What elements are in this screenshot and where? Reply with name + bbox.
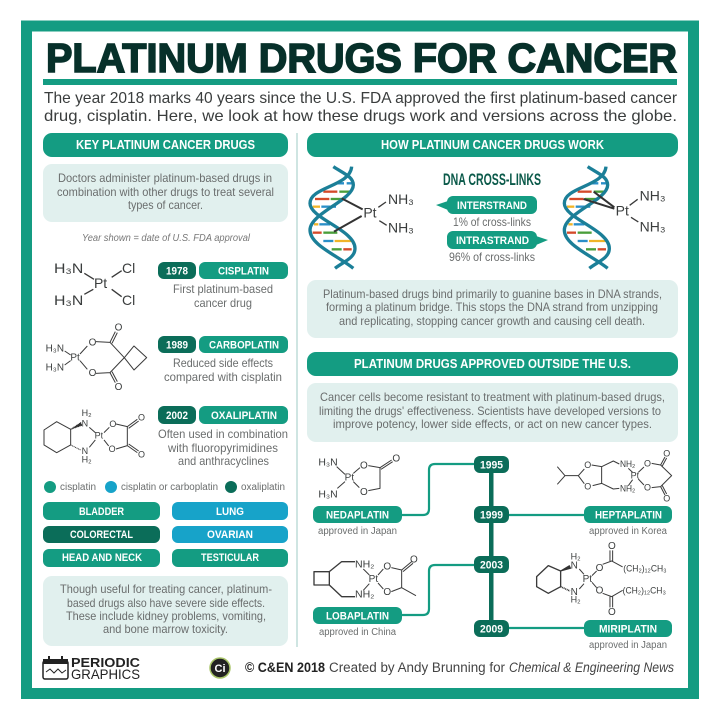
logo: periodic graphics: PERIODIC — [71, 656, 140, 670]
drug label: miriplatin — [584, 620, 672, 651]
drug label: oxaliplatin: and anthracyclines — [178, 455, 269, 468]
heading: outside the u.s. — [307, 352, 678, 376]
heading: how platinum drugs work — [307, 133, 678, 157]
drug label: cisplatin: CISPLATIN — [218, 266, 269, 278]
text block: resistance: improve potency, lower side effects, or act on new cancer types. — [333, 418, 652, 431]
molecule: lobaplatin: NH₂ — [355, 590, 374, 601]
callout: intrastrand: INTRASTRAND — [456, 235, 529, 247]
diagram: intrastrand cross-link: Pt — [616, 202, 629, 218]
text block: side effects: based drugs also have severe side effects. — [67, 597, 265, 610]
timeline: 2003 — [480, 560, 503, 572]
text block: mechanism: forming a platinum bridge. This stops the DNA strand from unzipping — [326, 301, 658, 314]
molecule: heptaplatin: O — [584, 460, 591, 470]
molecule: miriplatin: O — [596, 563, 604, 574]
molecule: nedaplatin: O — [360, 487, 368, 498]
text block: combination therapy: combination with other drugs to treat several — [57, 186, 274, 199]
molecule: cisplatin: H₃N — [54, 292, 83, 308]
molecule: oxaliplatin: H₂ — [82, 408, 92, 418]
molecule: nedaplatin — [318, 453, 400, 501]
title rule — [43, 79, 677, 85]
legend: oxaliplatin — [241, 482, 285, 493]
text block: side effects: These include kidney problems, vomiting, — [66, 610, 266, 623]
heading: outside the u.s.: PLATINUM DRUGS APPROVED OUTSIDE THE U.S. — [354, 357, 631, 371]
timeline — [402, 456, 584, 637]
legend: cisplatin — [60, 482, 96, 493]
molecule: heptaplatin: NH₂ — [620, 459, 636, 469]
molecule: nedaplatin: O — [360, 460, 368, 471]
timeline: 1999 — [480, 510, 503, 522]
callout: intrastrand: 96% of cross-links — [449, 251, 535, 264]
cancer type tags: OVARIAN — [207, 529, 253, 541]
drug label: cisplatin: First platinum-based — [173, 283, 273, 296]
molecule: carboplatin: O — [89, 337, 97, 348]
callout: intrastrand — [447, 231, 548, 264]
cancer type tags: TESTICULAR — [201, 552, 259, 564]
drug label: oxaliplatin: with fluoropyrimidines — [167, 442, 278, 455]
diagram: interstrand cross-link: NH₃ — [388, 191, 414, 207]
cancer type tags — [43, 502, 288, 567]
footer credit: Created by Andy Brunning for — [329, 660, 506, 675]
molecule: lobaplatin: O — [410, 554, 418, 565]
text block: resistance: limiting the drugs' effectiveness. Scientists have developed versions to — [319, 405, 661, 418]
molecule: carboplatin: H₃N — [46, 363, 64, 374]
molecule: miriplatin — [537, 541, 667, 618]
drug label: carboplatin: 1989 — [166, 340, 188, 352]
molecule: cisplatin: Cl — [122, 292, 135, 308]
text block: resistance — [307, 383, 678, 442]
callout: interstrand — [436, 196, 537, 229]
footer credit: Chemical & Engineering News — [509, 660, 674, 675]
molecule: miriplatin: H₂ — [571, 595, 581, 605]
molecule: miriplatin: Pt — [583, 574, 592, 585]
diagram: interstrand cross-link — [310, 167, 414, 268]
molecule: oxaliplatin: O — [138, 449, 145, 459]
logo: periodic graphics — [43, 656, 140, 682]
molecule: nedaplatin: Pt — [345, 473, 354, 484]
footer credit: © C&EN 2018 — [245, 660, 325, 675]
drug label: heptaplatin — [584, 506, 672, 537]
cancer type tags: HEAD AND NECK — [62, 552, 142, 564]
text block: side effects — [43, 576, 288, 646]
molecule: oxaliplatin: O — [138, 413, 145, 423]
text block: mechanism: and replicating, stopping cancer growth and causing cell death. — [339, 315, 645, 328]
drug label: cisplatin: cancer drug — [194, 297, 252, 310]
molecule: cisplatin — [54, 260, 135, 308]
text block: mechanism — [307, 280, 678, 338]
molecule: heptaplatin — [557, 448, 672, 504]
panel: platinum drugs approved outside the u.s. — [307, 352, 678, 651]
molecule: carboplatin: O — [115, 323, 123, 334]
callout: interstrand: INTERSTRAND — [457, 200, 527, 212]
molecule: heptaplatin: O — [663, 448, 670, 458]
intro text — [44, 90, 678, 125]
diagram: interstrand cross-link: Pt — [363, 204, 377, 220]
timeline: 1995 — [480, 460, 503, 472]
drug label: miriplatin: approved in Japan — [589, 640, 667, 651]
cancer type tags: LUNG — [216, 506, 244, 518]
drug label: heptaplatin: approved in Korea — [589, 526, 667, 537]
drug label: oxaliplatin — [158, 406, 288, 468]
intro text: drug, cisplatin. Here, we look at how these drugs work and versions across the globe. — [44, 108, 677, 125]
timeline: 2009 — [480, 624, 503, 636]
logo: periodic graphics: GRAPHICS — [71, 666, 140, 682]
diagram: intrastrand cross-link: NH₃ — [640, 188, 666, 204]
molecule: lobaplatin: O — [383, 562, 391, 573]
molecule: carboplatin: O — [89, 368, 97, 379]
molecule: heptaplatin: O — [663, 494, 670, 504]
molecule: nedaplatin: O — [392, 453, 400, 464]
molecule: cisplatin: Cl — [122, 260, 135, 276]
drug label: cisplatin: 1978 — [166, 266, 188, 278]
text block: side effects: Though useful for treating cancer, platinum- — [60, 583, 272, 596]
drug label: lobaplatin: approved in China — [319, 627, 396, 638]
text block: resistance: Cancer cells become resistant to treatment with platinum-based drugs, — [320, 391, 665, 404]
molecule: carboplatin — [46, 323, 147, 393]
molecule: miriplatin: O — [608, 607, 616, 618]
molecule: miriplatin: O — [596, 585, 604, 596]
drug label: nedaplatin: approved in Japan — [318, 526, 397, 537]
molecule: oxaliplatin: O — [109, 419, 116, 429]
drug label: oxaliplatin: OXALIPLATIN — [211, 410, 277, 422]
text block: side effects: and bone marrow toxicity. — [103, 623, 228, 636]
heading: dna cross-links: DNA CROSS-LINKS — [443, 171, 541, 189]
text block: mechanism: Platinum-based drugs bind primarily to guanine bases in DNA strands, — [323, 288, 662, 301]
molecule: cisplatin: Pt — [94, 275, 107, 291]
molecule: lobaplatin: Pt — [369, 574, 378, 585]
molecule: oxaliplatin: N — [82, 446, 88, 456]
drug label: carboplatin — [158, 336, 288, 384]
molecule: heptaplatin: Pt — [631, 470, 640, 480]
callout: interstrand: 1% of cross-links — [453, 216, 531, 229]
panel: key platinum cancer drugs — [43, 133, 288, 646]
note: year shown: Year shown = date of U.S. FDA approval — [82, 232, 251, 244]
molecule: miriplatin: H₂ — [571, 551, 581, 561]
molecule: carboplatin: Pt — [70, 352, 80, 363]
text block: combination therapy — [43, 164, 288, 222]
molecule: carboplatin: O — [115, 382, 123, 393]
drug label: lobaplatin: LOBAPLATIN — [326, 610, 389, 622]
drug label: nedaplatin: NEDAPLATIN — [326, 510, 389, 522]
drug label: cisplatin — [158, 262, 288, 310]
heading: how platinum drugs work: HOW PLATINUM CANCER DRUGS WORK — [381, 138, 604, 152]
diagram: intrastrand cross-link — [564, 167, 666, 268]
drug label: carboplatin: Reduced side effects — [173, 357, 273, 370]
footer credit: Ci — [214, 663, 226, 675]
intro text: The year 2018 marks 40 years since the U.S. FDA approved the first platinum-based cancer — [44, 90, 678, 107]
molecule: heptaplatin: O — [644, 482, 651, 492]
drug label: oxaliplatin: 2002 — [166, 410, 188, 422]
drug label: lobaplatin — [313, 607, 402, 638]
molecule: miriplatin: (CH₂)₁₂CH₃ — [623, 564, 667, 574]
text block: combination therapy: types of cancer. — [128, 199, 203, 212]
molecule: lobaplatin: NH₂ — [355, 559, 374, 570]
molecule: nedaplatin: H₃N — [318, 458, 338, 469]
molecule: heptaplatin: O — [584, 482, 591, 492]
molecule: cisplatin: H₃N — [54, 260, 83, 276]
drug label: miriplatin: MIRIPLATIN — [599, 624, 657, 636]
title: PLATINUM DRUGS FOR CANCER — [46, 35, 677, 81]
legend: cisplatin or carboplatin — [121, 482, 218, 493]
panel: how platinum cancer drugs work — [307, 133, 678, 338]
molecule: lobaplatin: O — [383, 587, 391, 598]
legend — [44, 481, 285, 493]
molecule: miriplatin: O — [608, 541, 616, 552]
drug label: carboplatin: compared with cisplatin — [164, 371, 282, 384]
molecule: oxaliplatin: N — [82, 419, 88, 429]
molecule: oxaliplatin: H₂ — [82, 455, 92, 465]
heading: key platinum cancer drugs: KEY PLATINUM CANCER DRUGS — [76, 138, 255, 152]
cancer type tags: COLORECTAL — [70, 529, 133, 541]
molecule: miriplatin: (CH₂)₁₂CH₃ — [623, 586, 666, 596]
molecule: heptaplatin: O — [644, 459, 651, 469]
molecule: oxaliplatin — [44, 408, 145, 465]
drug label: nedaplatin — [313, 506, 402, 537]
drug label: carboplatin: CARBOPLATIN — [209, 340, 279, 352]
diagram: interstrand cross-link: NH₃ — [388, 220, 414, 236]
heading: key platinum cancer drugs — [43, 133, 288, 157]
drug label: oxaliplatin: Often used in combination — [158, 428, 288, 441]
molecule: lobaplatin — [314, 554, 418, 601]
molecule: oxaliplatin: Pt — [95, 431, 104, 441]
molecule: nedaplatin: H₃N — [318, 490, 338, 501]
molecule: oxaliplatin: O — [109, 444, 116, 454]
molecule: heptaplatin: NH₂ — [620, 483, 636, 493]
footer credit — [210, 658, 674, 678]
molecule: carboplatin: H₃N — [46, 344, 64, 355]
diagram: intrastrand cross-link: NH₃ — [640, 218, 666, 234]
cancer type tags: BLADDER — [79, 506, 124, 518]
drug label: heptaplatin: HEPTAPLATIN — [595, 510, 662, 522]
molecule: miriplatin: N — [571, 560, 578, 571]
text block: combination therapy: Doctors administer platinum-based drugs in — [58, 172, 272, 185]
molecule: miriplatin: N — [571, 587, 578, 598]
